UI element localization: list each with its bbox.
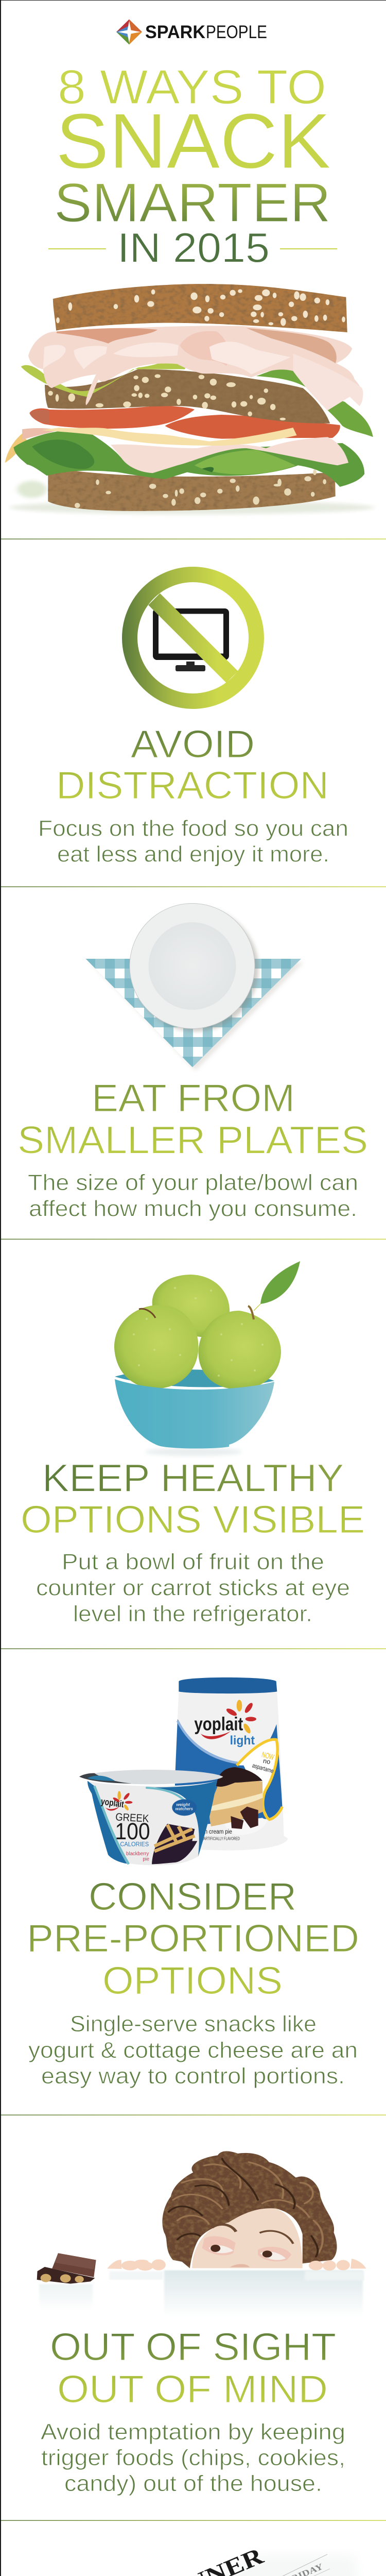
icon: plate on napkin <box>85 904 304 1071</box>
image: yogurt cups <box>79 1677 288 1866</box>
yogurt cup: Yoplait Light: & ARTIFICIALLY FLAVORED <box>201 1836 240 1841</box>
yogurt cup: Yoplait Greek 100 <box>79 1770 223 1866</box>
yogurt cup: Yoplait Greek 100: yoplait <box>100 1796 125 1809</box>
yogurt cup: Yoplait Light: on cream pie <box>202 1828 232 1835</box>
yogurt cup: Yoplait Greek 100: pie <box>143 1857 149 1862</box>
body text: affect how much you consume. <box>29 1196 357 1222</box>
panel: header <box>5 20 374 514</box>
yogurt cup: Yoplait Greek 100: weight <box>176 1802 190 1807</box>
divider <box>1 2114 386 2115</box>
body text: counter or carrot sticks at eye <box>36 1575 350 1600</box>
body text <box>28 2011 358 2089</box>
panel: plan ahead <box>31 2542 365 2576</box>
title: 8 WAYS TO <box>58 60 326 114</box>
divider <box>1 2520 386 2521</box>
body text: level in the refrigerator. <box>73 1601 312 1626</box>
heading <box>17 1076 368 1162</box>
body text: trigger foods (chips, cookies, <box>41 2445 345 2470</box>
title: SNACK <box>56 97 331 185</box>
heading <box>56 722 329 807</box>
panel: avoid distraction <box>38 574 348 867</box>
heading: KEEP HEALTHY <box>42 1456 344 1499</box>
heading: AVOID <box>131 722 255 766</box>
heading: OPTIONS <box>102 1959 283 2002</box>
body text: easy way to control portions. <box>41 2063 345 2089</box>
panel: keep healthy options visible <box>21 1261 365 1626</box>
title <box>48 60 337 272</box>
yogurt cup: Yoplait Greek 100: blackberry <box>126 1851 149 1857</box>
heading <box>21 1456 365 1541</box>
yogurt cup: Yoplait Light: NOW <box>261 1750 275 1762</box>
title: SMARTER <box>54 172 331 233</box>
yogurt cup: Yoplait Greek 100: CALORIES <box>120 1840 149 1848</box>
heading: DISTRACTION <box>56 764 329 807</box>
heading: OPTIONS VISIBLE <box>21 1498 365 1541</box>
image: menu planner and pencil <box>31 2542 365 2576</box>
body text <box>38 816 348 867</box>
body text: eat less and enjoy it more. <box>57 841 329 867</box>
heading: OUT OF SIGHT <box>50 2325 336 2368</box>
logo: SparkPeople: PEOPLE <box>206 22 267 42</box>
body text: Put a bowl of fruit on the <box>62 1549 324 1574</box>
body text: Avoid temptation by keeping <box>41 2419 345 2445</box>
body text <box>41 2419 345 2496</box>
yogurt cup: Yoplait Light: light <box>230 1734 255 1748</box>
body text <box>28 1170 358 1222</box>
heading <box>50 2325 336 2411</box>
body text: The size of your plate/bowl can <box>28 1170 358 1195</box>
heading <box>27 1875 359 2002</box>
body text: Single-serve snacks like <box>70 2011 317 2037</box>
heading: OUT OF MIND <box>57 2367 328 2411</box>
heading: CONSIDER <box>89 1875 296 1918</box>
divider <box>1 886 386 887</box>
yogurt cup: Yoplait Light: no <box>262 1757 271 1766</box>
body text: candy) out of the house. <box>64 2471 322 2496</box>
panel: out of sight out of mind <box>37 2151 366 2496</box>
title: IN 2015 <box>117 225 270 272</box>
panel: smaller plates <box>17 904 368 1222</box>
body text: Focus on the food so you can <box>38 816 348 841</box>
yogurt cup: Yoplait Light <box>175 1677 288 1851</box>
divider <box>1 1239 386 1240</box>
panel: pre-portioned options <box>27 1677 359 2089</box>
yogurt cup: Yoplait Greek 100: 100 <box>115 1818 150 1844</box>
body text: yogurt & cottage cheese are an <box>28 2038 358 2063</box>
heading: PRE-PORTIONED <box>27 1917 359 1960</box>
yogurt cup: Yoplait Light: aspartame <box>252 1761 275 1775</box>
logo: SparkPeople <box>116 20 267 44</box>
heading: SMALLER PLATES <box>17 1118 368 1162</box>
image: apples in a bowl <box>114 1261 300 1456</box>
yogurt cup: Yoplait Light: yoplait <box>194 1713 243 1734</box>
yogurt cup: Yoplait Greek 100: watchers <box>176 1806 193 1811</box>
yogurt cup: Yoplait Greek 100: GREEK <box>115 1811 149 1825</box>
image: boy peeking over a table at chocolate <box>37 2151 366 2317</box>
icon: no TV <box>130 574 256 701</box>
heading: EAT FROM <box>92 1076 295 1120</box>
image: sandwich <box>5 284 374 514</box>
body text <box>36 1549 350 1626</box>
logo: SparkPeople: SPARK <box>145 22 205 42</box>
